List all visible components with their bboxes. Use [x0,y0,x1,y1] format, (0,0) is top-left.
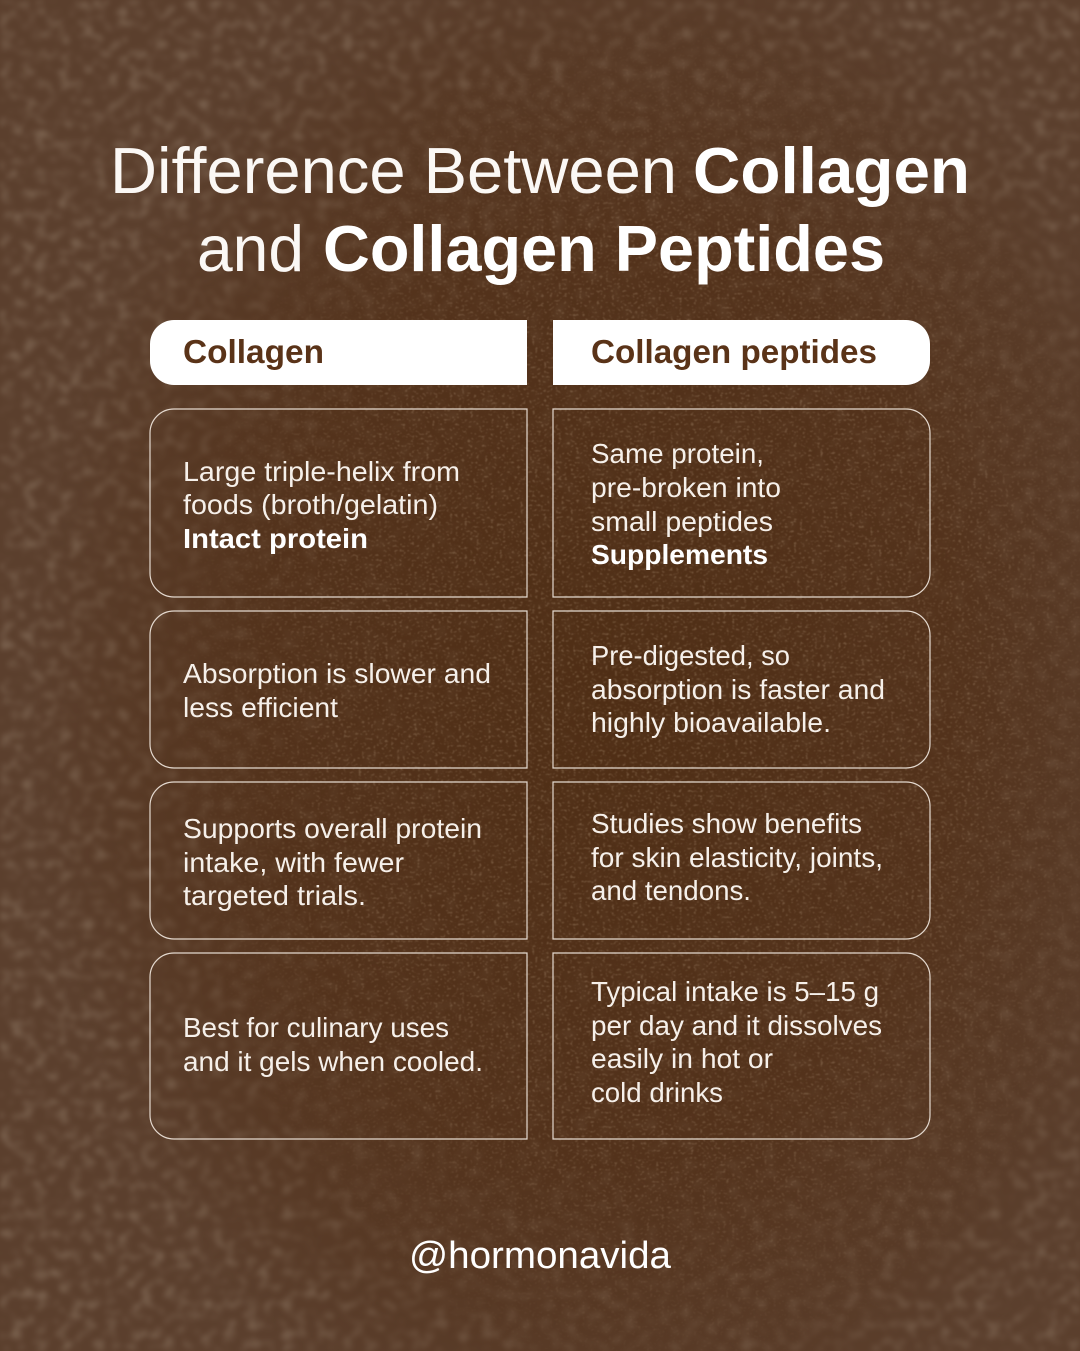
title [110,134,970,285]
header: Collagen peptides [553,320,930,385]
panel: collagen uses [150,953,527,1139]
title: Collagen [693,134,970,207]
panel: collagen absorption [150,611,527,768]
handle: @hormonavida [409,1235,672,1277]
panel: collagen evidence: Supports overall protein [183,813,482,844]
panel: collagen uses: and it gels when cooled. [183,1046,483,1077]
panel: peptides intake: Typical intake is 5–15 g [591,976,879,1007]
panel: peptides evidence: and tendons. [591,875,751,906]
header: Collagen peptides: Collagen peptides [591,333,877,370]
panel: collagen absorption: less efficient [183,692,338,723]
panel: collagen absorption: Absorption is slower and [183,658,491,689]
panel: peptides structure: small peptides [591,506,773,537]
panel: collagen evidence [150,782,527,939]
title: Collagen Peptides [323,212,885,285]
panel: collagen uses: Best for culinary uses [183,1012,449,1043]
panel: peptides intake: per day and it dissolves [591,1010,882,1041]
panel: collagen structure: foods (broth/gelatin) [183,489,438,520]
panel: peptides structure: Same protein, [591,438,764,469]
panel: peptides absorption: Pre-digested, so [591,640,790,671]
panel: peptides structure [553,409,930,597]
header: Collagen [150,320,527,385]
panel: peptides evidence: Studies show benefits [591,808,862,839]
panel: peptides intake [553,953,930,1139]
panel: collagen structure: Large triple-helix from [183,456,460,487]
panel: peptides absorption [553,611,930,768]
header: Collagen: Collagen [183,333,324,370]
title: and [197,212,304,285]
panel: peptides evidence [553,782,930,939]
panel: peptides structure: Supplements [591,539,768,570]
title: Difference Between [110,134,677,207]
panel: peptides structure: pre-broken into [591,472,781,503]
panel: peptides intake: easily in hot or [591,1043,773,1074]
panel: peptides intake: cold drinks [591,1077,723,1108]
panel: collagen evidence: targeted trials. [183,880,366,911]
panel: peptides absorption: absorption is faster and [591,674,885,705]
panel: peptides absorption: highly bioavailable. [591,707,831,738]
panel: peptides evidence: for skin elasticity, joints, [591,842,883,873]
panel: collagen evidence: intake, with fewer [183,847,404,878]
panel: collagen structure [150,409,527,597]
panel: collagen structure: Intact protein [183,523,368,554]
